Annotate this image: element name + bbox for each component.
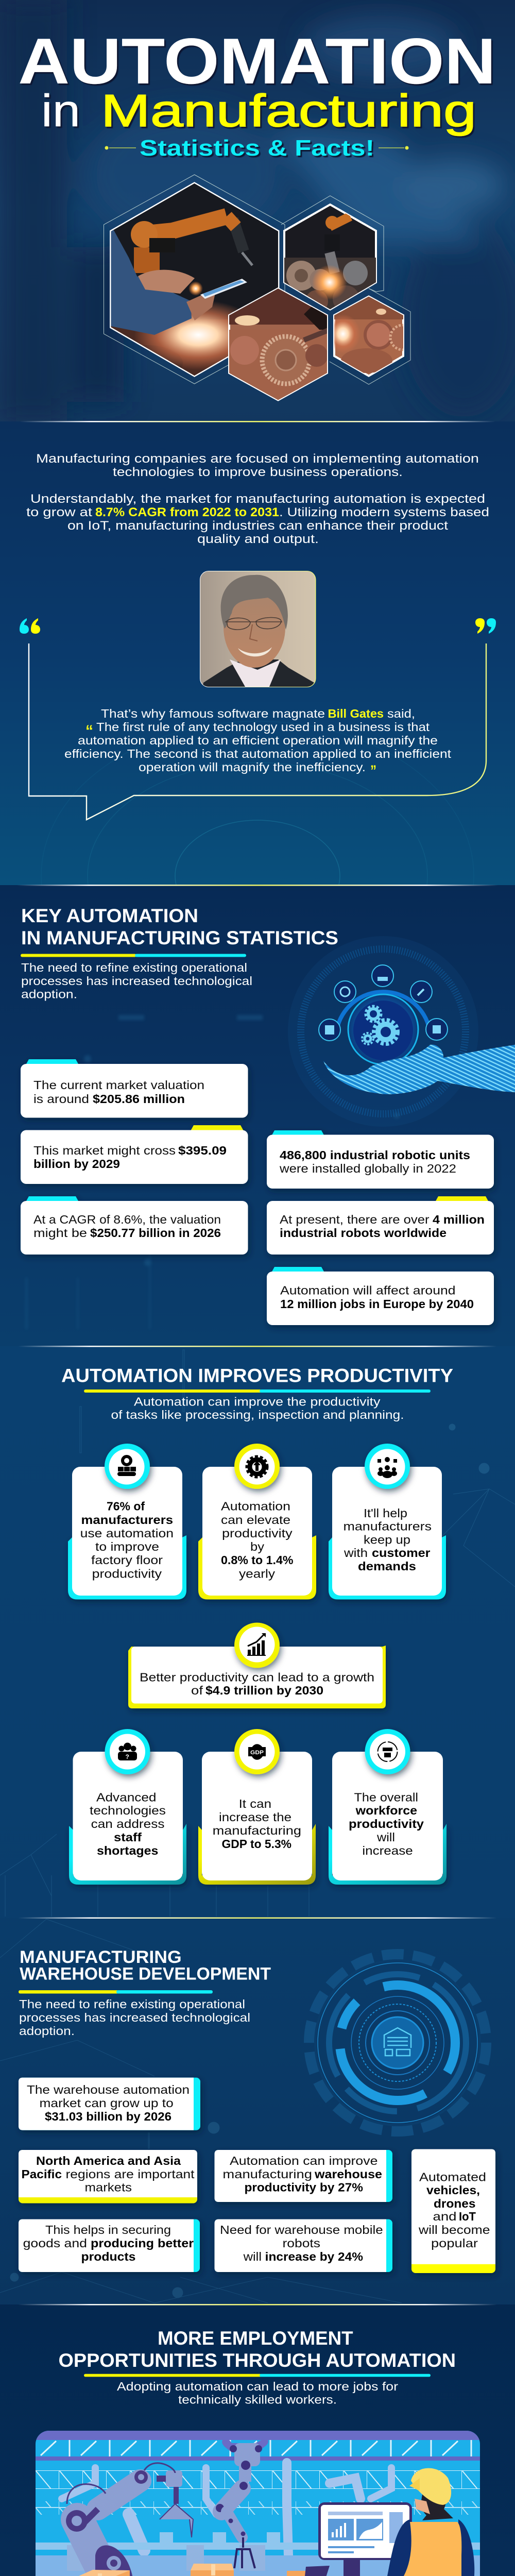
card: workforce productivity xyxy=(329,1729,447,1885)
stat card: market valuation: The current market valuation xyxy=(33,1078,204,1092)
intro paragraph 2: 8.7% CAGR from 2022 to 2031 xyxy=(95,505,279,519)
card: customer demands xyxy=(329,1444,446,1599)
card: automated vehicles xyxy=(411,2149,495,2273)
card: warehouse productivity: Automation can improve xyxy=(230,2154,377,2167)
card: warehouse automation market: $31.03 billion by 2026 xyxy=(45,2110,171,2123)
icon: gear with arrow xyxy=(234,1444,280,1489)
subheading: adoption. xyxy=(21,987,77,1001)
card: 76% of manufacturers: use automation xyxy=(80,1527,174,1540)
central robot arm xyxy=(222,2440,268,2452)
quote text: operation will magnify the inefficiency. xyxy=(139,760,366,774)
card: workforce productivity: increase xyxy=(362,1844,413,1857)
quote text: automation applied to an efficient operation will magnify the xyxy=(78,734,438,747)
quote text: efficiency. The second is that automation applied to an inefficient xyxy=(64,747,452,760)
icon: unknown staff xyxy=(105,1729,150,1774)
subheading: processes has increased technological xyxy=(21,974,252,988)
card: elevate productivity: yearly xyxy=(239,1567,275,1581)
card: automated vehicles: will become xyxy=(418,2223,490,2236)
card: customer demands: It'll help xyxy=(364,1506,407,1520)
decorative network lines xyxy=(0,1919,402,2303)
stat card: CAGR valuation xyxy=(21,1196,248,1255)
quote mark: closing xyxy=(475,618,496,634)
card: 76% of manufacturers: manufacturers xyxy=(81,1513,173,1527)
hexagon outline frames xyxy=(104,175,410,384)
subtitle: Statistics & Facts xyxy=(105,135,409,161)
intro paragraph 2: Understandably, the market for manufacturing automation is expected xyxy=(30,492,485,506)
subheading: Automation can improve the productivity xyxy=(134,1395,381,1409)
card: staff shortages: shortages xyxy=(97,1844,158,1857)
subheading xyxy=(21,961,252,1001)
heading: MORE EMPLOYMENT xyxy=(158,2328,353,2349)
heading underline xyxy=(84,2374,431,2377)
stat card: CAGR valuation: $250.77 billion in 2026 xyxy=(90,1226,221,1240)
background arcs xyxy=(41,721,474,1030)
card: growth callout: $4.9 trillion by 2030 xyxy=(205,1684,323,1697)
icon: rising chart xyxy=(234,1623,280,1668)
card: customer demands: demands xyxy=(358,1560,416,1573)
card: elevate productivity: 0.8% to 1.4% xyxy=(221,1553,294,1567)
card: important markets: markets xyxy=(84,2181,132,2194)
photo hexagon: gears xyxy=(229,289,330,402)
title: in Manufacturing xyxy=(41,85,476,136)
card: manufacturing GDP: increase the xyxy=(219,1810,291,1824)
intro paragraph 1: technologies to improve business operations. xyxy=(113,465,403,479)
heading underline xyxy=(84,1389,431,1393)
card: growth callout xyxy=(128,1623,386,1708)
card: automated vehicles: drones xyxy=(434,2197,476,2210)
stat card: jobs in Europe: Automation will affect around xyxy=(280,1284,455,1297)
quote text: “ xyxy=(85,722,93,739)
card: warehouse productivity: manufacturing xyxy=(222,2167,312,2181)
card: warehouse productivity: warehouse xyxy=(314,2167,382,2181)
card: elevate productivity: by xyxy=(250,1540,264,1553)
stat card: robotic units xyxy=(267,1130,494,1189)
panel: introduction and quote xyxy=(0,421,515,885)
stat card: 2029 forecast xyxy=(21,1125,248,1184)
card: customer demands: with xyxy=(344,1546,368,1560)
panel: more employment opportunities xyxy=(0,2304,515,2576)
quote text: Bill Gates xyxy=(328,707,384,720)
hero background: blurred man with tablet xyxy=(0,0,515,421)
stat card: jobs in Europe: 12 million jobs in Europe by 2040 xyxy=(280,1297,474,1311)
subtitle: Statistics & Facts: Statistics & Facts! xyxy=(140,135,374,161)
card: warehouse productivity: productivity by 27% xyxy=(244,2181,363,2194)
card: mobile robots: Need for warehouse mobile xyxy=(220,2223,383,2236)
card: staff shortages: Advanced xyxy=(96,1790,157,1804)
divider xyxy=(17,885,498,886)
intro paragraph 1 xyxy=(36,452,479,479)
card: warehouse automation market: The warehouse automation xyxy=(27,2083,190,2096)
heading underline xyxy=(21,954,246,957)
quote text: ” xyxy=(370,762,376,779)
card: workforce productivity: workforce xyxy=(355,1804,417,1817)
heading xyxy=(21,905,338,948)
card: warehouse automation market xyxy=(19,2078,200,2130)
card: warehouse productivity xyxy=(214,2150,392,2202)
card: automated vehicles: IoT xyxy=(459,2210,476,2223)
card: mobile robots xyxy=(214,2219,392,2272)
subheading xyxy=(111,1395,404,1421)
card: important markets xyxy=(19,2150,197,2203)
title: AUTOMATION: AUTOMATION xyxy=(18,25,496,97)
stat card: robotic units: 486,800 industrial robotic units xyxy=(280,1148,470,1162)
card: 76% of manufacturers: productivity xyxy=(92,1567,162,1581)
intro paragraph 2: quality and output. xyxy=(197,532,319,546)
stat card: 4 million robots xyxy=(267,1196,494,1255)
card: workforce productivity: The overall xyxy=(354,1790,418,1804)
heading: WAREHOUSE DEVELOPMENT xyxy=(20,1964,271,1984)
illustration: gear with warehouse xyxy=(309,1954,486,2131)
icon: GDP globe: GDP xyxy=(250,1750,264,1756)
illustration: factory with robot arms and worker xyxy=(36,2431,480,2576)
photo hexagon: welding robot xyxy=(284,205,377,313)
card: manufacturing GDP: GDP to 5.3% xyxy=(221,1837,291,1851)
divider xyxy=(18,2304,497,2305)
card: mobile robots: will xyxy=(243,2250,262,2263)
card: warehouse automation market: market can grow up to xyxy=(39,2096,174,2110)
card: important markets: North America and Asia xyxy=(36,2154,181,2167)
intro paragraph 1: Manufacturing companies are focused on implementing automation xyxy=(36,452,479,466)
card: automated vehicles: and xyxy=(433,2210,456,2223)
heading: IN MANUFACTURING STATISTICS xyxy=(21,927,338,948)
card: workforce productivity: productivity xyxy=(349,1817,424,1831)
card: better products: goods and xyxy=(23,2236,87,2250)
card: elevate productivity xyxy=(198,1444,316,1599)
portrait: Bill Gates xyxy=(200,571,316,690)
stat card: robotic units: were installed globally in 2022 xyxy=(279,1162,456,1175)
stat card: CAGR valuation: At a CAGR of 8.6%, the valuation xyxy=(33,1213,221,1226)
subheading: of tasks like processing, inspection and planning. xyxy=(111,1408,404,1421)
card: mobile robots: increase by 24% xyxy=(265,2250,363,2263)
card: better products xyxy=(19,2219,200,2272)
stat card: 2029 forecast: This market might cross xyxy=(33,1144,176,1157)
quote mark: opening xyxy=(20,618,40,634)
card: manufacturing GDP: It can xyxy=(239,1797,271,1810)
card: 76% of manufacturers xyxy=(68,1444,186,1599)
subheading: processes has increased technological xyxy=(19,2011,250,2024)
quote text xyxy=(64,707,452,779)
card: automated vehicles: vehicles, xyxy=(426,2183,480,2197)
stat card: market valuation: $205.86 million xyxy=(93,1092,185,1106)
subheading: adoption. xyxy=(19,2024,75,2038)
icon: conveyor gear xyxy=(105,1444,150,1489)
divider xyxy=(18,1346,497,1347)
card: customer demands: keep up xyxy=(364,1533,410,1547)
card: growth callout: Better productivity can lead to a growth xyxy=(140,1670,374,1684)
card: automated vehicles: popular xyxy=(431,2236,478,2250)
heading: MANUFACTURING xyxy=(20,1947,182,1967)
background robot arms xyxy=(62,2463,391,2555)
card: better products: producing better xyxy=(91,2236,194,2250)
main robot arm left xyxy=(77,2519,103,2571)
divider xyxy=(20,421,495,422)
card: customer demands: customer xyxy=(372,1546,431,1560)
card: growth callout: of xyxy=(191,1684,203,1697)
decorative network and light streaks xyxy=(0,1350,515,1917)
stat card: market valuation: is around xyxy=(33,1092,89,1106)
photo hexagon: engineer with robot arm xyxy=(111,183,278,381)
subheading xyxy=(117,2380,398,2406)
intro paragraph 2 xyxy=(26,492,489,546)
card: elevate productivity: can elevate xyxy=(221,1513,290,1527)
card: staff shortages: technologies xyxy=(90,1804,166,1817)
monitor xyxy=(318,2502,412,2560)
stat card: market valuation xyxy=(21,1059,248,1118)
heading xyxy=(20,1947,271,1984)
icon: customers xyxy=(365,1444,410,1489)
quote text: said, xyxy=(387,707,415,720)
title: in Manufacturing: in xyxy=(41,85,80,136)
card: 76% of manufacturers: factory floor xyxy=(91,1553,163,1567)
heading: AUTOMATION IMPROVES PRODUCTIVITY xyxy=(61,1365,453,1386)
card: manufacturing GDP xyxy=(198,1729,316,1885)
stat card: 4 million robots: 4 million xyxy=(433,1213,485,1226)
subheading: The need to refine existing operational xyxy=(21,961,247,974)
intro paragraph 2: . Utilizing modern systems based xyxy=(279,505,489,519)
stat card: 4 million robots: industrial robots worldwide xyxy=(280,1226,447,1240)
card: elevate productivity: Automation xyxy=(221,1500,290,1513)
card: 76% of manufacturers: 76% of xyxy=(107,1500,145,1513)
stat card: 2029 forecast: $395.09 xyxy=(178,1144,227,1157)
heading xyxy=(59,2328,456,2371)
card: mobile robots: robots xyxy=(282,2236,320,2250)
card: manufacturing GDP: manufacturing xyxy=(213,1824,301,1837)
card: better products: products xyxy=(81,2250,135,2263)
panel: key statistics xyxy=(0,885,515,1346)
card: important markets: regions are important xyxy=(66,2167,195,2181)
card: staff shortages xyxy=(69,1729,186,1885)
photo hexagon: machine glow xyxy=(333,295,404,377)
icon: unknown staff: ? xyxy=(126,1753,129,1760)
card: customer demands: manufacturers xyxy=(343,1520,432,1533)
illustration: robotic hand holding gears xyxy=(288,936,515,1127)
card: 76% of manufacturers: to improve xyxy=(95,1540,159,1553)
card: automated vehicles: Automated xyxy=(419,2170,486,2183)
card: important markets: Pacific xyxy=(22,2167,62,2181)
stat card: 4 million robots: At present, there are over xyxy=(280,1213,430,1226)
speech bubble outline xyxy=(29,643,486,820)
panel: automation improves productivity xyxy=(0,1346,515,1918)
heading underline xyxy=(19,1990,213,1994)
card: better products: This helps in securing xyxy=(45,2223,171,2236)
panel: hero header xyxy=(0,0,515,421)
title: in Manufacturing: Manufacturing xyxy=(101,85,476,136)
heading: KEY AUTOMATION xyxy=(21,905,198,926)
card: staff shortages: can address xyxy=(91,1817,165,1831)
intro paragraph 2: on IoT, manufacturing industries can enhance their product xyxy=(67,519,448,533)
subheading: technically skilled workers. xyxy=(178,2393,337,2406)
subheading: Adopting automation can lead to more jobs for xyxy=(117,2380,398,2393)
card: staff shortages: staff xyxy=(114,1831,142,1844)
icon: GDP globe xyxy=(234,1729,280,1774)
background city blur xyxy=(26,1015,400,1329)
icon: workforce cycle xyxy=(365,1729,410,1774)
divider xyxy=(18,1918,497,1919)
card: elevate productivity: productivity xyxy=(222,1527,293,1540)
subheading: The need to refine existing operational xyxy=(19,1997,245,2011)
quote text: That’s why famous software magnate xyxy=(101,707,325,720)
stat card: CAGR valuation: might be xyxy=(33,1226,87,1240)
factory band xyxy=(36,2543,480,2550)
stat card: 2029 forecast: billion by 2029 xyxy=(33,1157,120,1171)
panel: warehouse development xyxy=(0,1918,515,2304)
card: workforce productivity: will xyxy=(376,1831,395,1844)
heading: OPPORTUNITIES THROUGH AUTOMATION xyxy=(59,2350,456,2371)
stat card: jobs in Europe xyxy=(267,1267,494,1325)
worker xyxy=(387,2519,411,2576)
quote text: The first rule of any technology used in a business is that xyxy=(96,720,430,734)
subheading xyxy=(19,1997,250,2038)
intro paragraph 2: to grow at xyxy=(26,505,92,519)
